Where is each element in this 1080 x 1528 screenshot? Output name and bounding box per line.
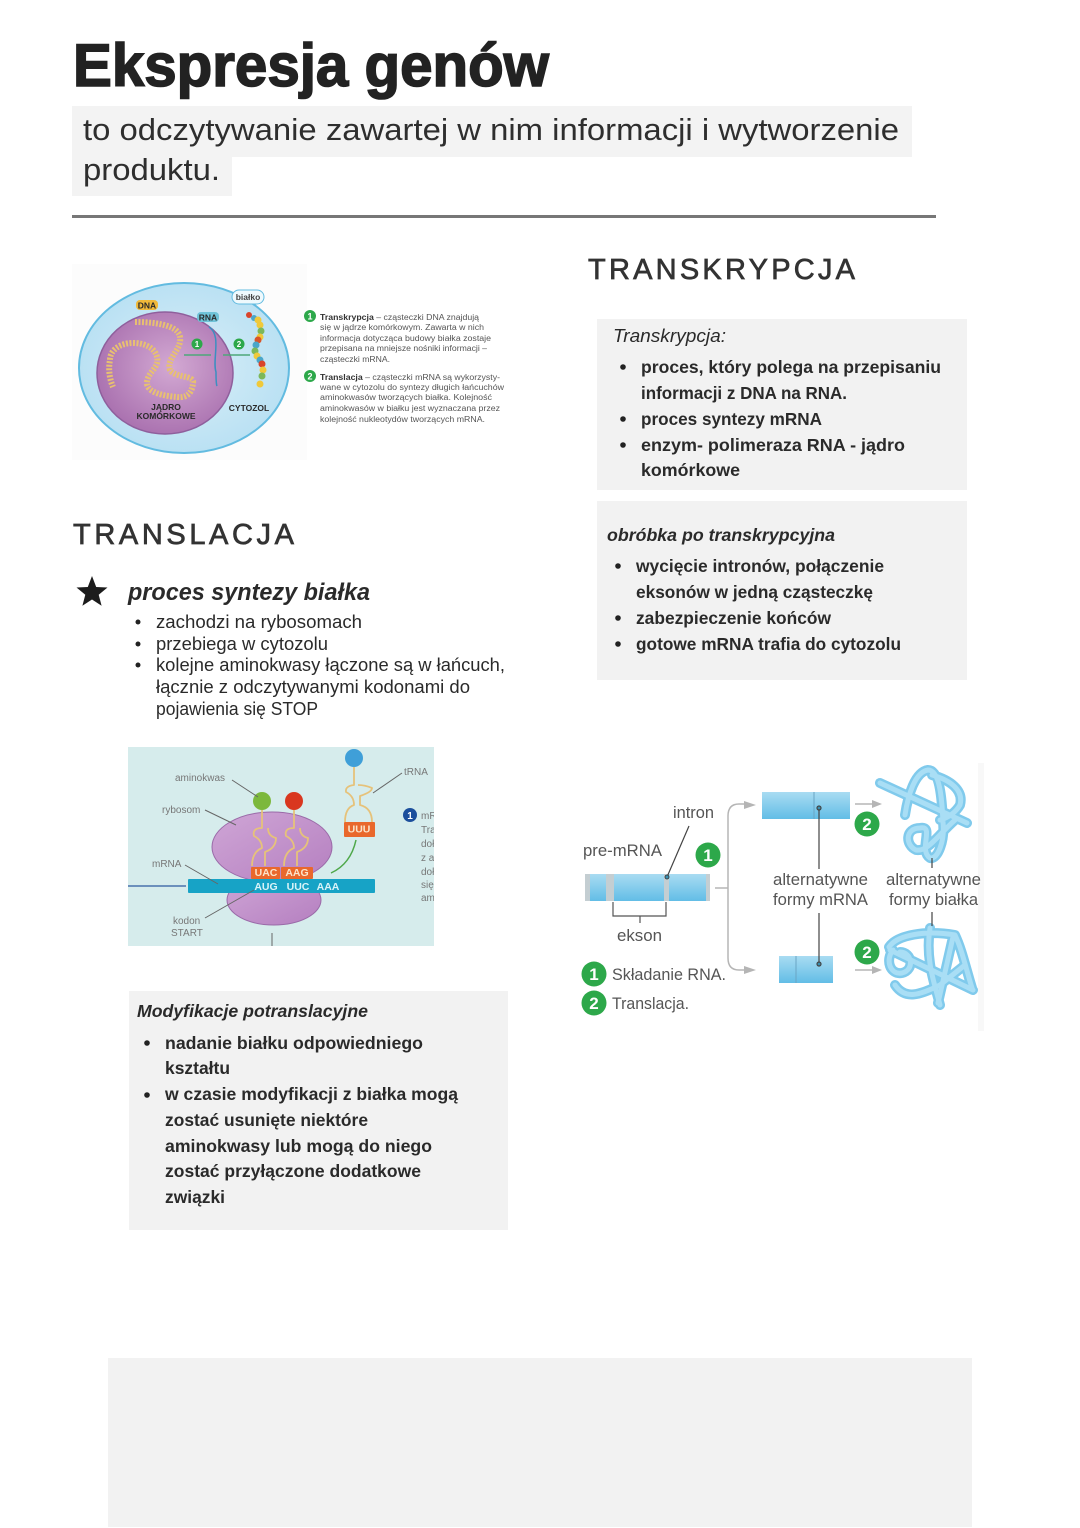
protein label	[886, 870, 981, 909]
figure caption: się w jądrze komórkowym. Zawarta w nich	[320, 323, 484, 332]
panel: transcription: Transkrypcja:	[613, 326, 726, 346]
clipped side note: 1	[407, 811, 413, 822]
step 1 badge	[304, 310, 316, 322]
clipped side note: dołącz	[421, 839, 450, 850]
legend: 1	[589, 965, 599, 984]
legend	[582, 962, 726, 1016]
translation bullet list: przebiega w cytozolu	[156, 633, 328, 654]
anticodons: UUU	[348, 824, 370, 836]
panel: post-translational modifications: aminokwasy lub mogą do niego	[165, 1136, 432, 1156]
mRNA label: formy mRNA	[773, 890, 869, 909]
labels: rybosom	[162, 805, 200, 816]
label lines	[185, 773, 402, 946]
figure caption	[304, 310, 504, 424]
clipped side note: sięga	[421, 880, 445, 891]
panel: post-transcriptional processing: wycięcie intronów, połączenie	[635, 556, 884, 576]
panel: post-transcriptional processing: obróbka po transkrypcyjna	[607, 525, 835, 545]
arrows and step badges: 2	[237, 340, 242, 349]
anticodons	[251, 822, 375, 879]
panel: post-transcriptional processing	[597, 501, 967, 680]
ribosome	[212, 812, 332, 925]
protein label	[232, 290, 264, 304]
translation bullet list: kolejne aminokwasy łączone są w łańcuch,	[156, 654, 505, 675]
panel: transcription: enzym- polimeraza RNA - jądro	[641, 435, 905, 455]
translation bullet list: pojawienia się STOP	[156, 698, 318, 719]
anticodons: AAG	[285, 867, 309, 879]
mRNA form A	[762, 792, 850, 819]
title: Ekspresja genów	[73, 32, 549, 99]
nucleus	[97, 312, 233, 434]
figure caption: informacja dotycząca budowy białka zostaje	[320, 334, 492, 343]
panel: transcription: proces, który polega na przepisaniu	[641, 357, 941, 377]
DNA strand	[109, 322, 193, 397]
heading: Translacja: TRANSLACJA	[73, 519, 295, 551]
panel: post-translational modifications: kształtu	[165, 1058, 230, 1078]
legend: Składanie RNA.	[612, 965, 726, 984]
mRNA strand: AUG	[254, 881, 278, 893]
mRNA label: alternatywne	[773, 870, 868, 889]
pre-mRNA bar	[585, 874, 710, 901]
panel: post-translational modifications	[129, 991, 508, 1230]
panel: post-translational modifications: nadanie białku odpowiedniego	[165, 1033, 423, 1053]
figure: alternative splicing: ekson	[617, 926, 662, 945]
panel: post-translational modifications: Modyfikacje potranslacyjne	[137, 1001, 368, 1021]
intron label: intron	[673, 803, 714, 822]
nucleus label	[136, 402, 196, 421]
nucleus label: JĄDRO	[151, 402, 181, 412]
panel: post-translational modifications: w czasie modyfikacji z białka mogą	[164, 1084, 458, 1104]
RNA label: RNA	[199, 312, 217, 322]
bottom grey panel	[108, 1358, 972, 1527]
arrow: incoming tRNA	[331, 840, 356, 873]
tRNA molecules	[252, 767, 372, 866]
labels	[152, 767, 428, 939]
intron label	[665, 803, 714, 879]
mRNA strand: AAA	[317, 881, 340, 893]
mRNA strand: UUC	[287, 881, 310, 893]
splitting arrows	[715, 800, 882, 974]
translation bullet list: łącznie z odczytywanymi kodonami do	[156, 676, 470, 697]
translation bullet list	[136, 611, 505, 719]
DNA label: DNA	[138, 300, 156, 310]
figure caption: przepisana na mniejsze nośniki informacji –	[320, 344, 488, 353]
amino acid chain	[246, 312, 266, 388]
protein leader lines	[931, 858, 933, 926]
step 2 badges	[854, 812, 880, 964]
figure caption: kolejność nukleotydów tworzących mRNA.	[320, 415, 485, 424]
figure: alternative splicing	[582, 763, 984, 1031]
labels: mRNA	[152, 859, 182, 870]
step 2 badge	[304, 370, 316, 382]
step 1 badge	[696, 842, 720, 868]
clipped side note: z ami	[421, 853, 445, 864]
figure caption: aminokwasów w białku jest wyznaczana przez	[320, 404, 500, 413]
translation key statement: proces syntezy białka	[127, 579, 370, 606]
panel: post-translational modifications: związki	[165, 1187, 225, 1207]
cell body	[79, 283, 289, 453]
legend: Translacja.	[612, 994, 689, 1013]
step 1 badge: 1	[307, 312, 313, 322]
subtitle highlighted definition	[72, 106, 912, 196]
protein form B	[889, 928, 973, 1005]
figure caption: Transkrypcja – cząsteczki DNA znajdują	[320, 313, 480, 322]
panel: post-transcriptional processing: zabezpieczenie końców	[636, 608, 831, 628]
arrows and step badges: 1	[195, 340, 200, 349]
panel: transcription: informacji z DNA na RNA.	[641, 383, 847, 403]
nucleus label: KOMÓRKOWE	[136, 410, 196, 421]
legend: 2	[589, 994, 599, 1013]
panel: post-translational modifications: zostać usunięte niektóre	[165, 1110, 368, 1130]
protein label: białko	[236, 292, 260, 302]
panel: transcription	[597, 319, 967, 490]
panel: post-translational modifications: zostać przyłączone dodatkowe	[165, 1161, 421, 1181]
pre-mRNA label: pre-mRNA	[583, 841, 663, 860]
protein label: formy białka	[889, 890, 979, 909]
mRNA strand	[209, 327, 217, 386]
figure caption: wane w cytozolu do syntezy długich łańcuchów	[319, 383, 504, 392]
labels: kodon	[173, 916, 200, 927]
translation bullet list: zachodzi na rybosomach	[156, 611, 362, 632]
mRNA strand	[128, 879, 375, 893]
subtitle highlighted definition: to odczytywanie zawartej w nim informacji i wytworzenie	[83, 112, 899, 147]
step 1 badge: 1	[703, 846, 713, 865]
labels: tRNA	[404, 767, 428, 778]
icon: star	[76, 576, 108, 606]
clipped side note	[403, 808, 434, 901]
mRNA leader lines	[817, 806, 821, 966]
figure: gene expression in the cell	[72, 264, 307, 460]
protein label: alternatywne	[886, 870, 981, 889]
panel: transcription: komórkowe	[641, 460, 740, 480]
figure: ribosome translation	[128, 747, 451, 946]
clipped side note: dołącz	[421, 867, 450, 878]
panel: post-transcriptional processing: gotowe mRNA trafia do cytozolu	[636, 634, 901, 654]
cytosol label: CYTOZOL	[229, 403, 269, 413]
clipped side note: mRNA	[421, 811, 451, 822]
amino acids	[253, 749, 363, 810]
exon bracket	[613, 902, 666, 923]
mRNA form B	[779, 956, 833, 983]
labels: START	[171, 928, 203, 939]
figure caption: aminokwasów tworzących białka. Kolejność	[320, 393, 492, 402]
clipped side note: Transl	[421, 825, 448, 836]
arrows and step badges	[184, 338, 250, 355]
panel: post-transcriptional processing: eksonów w jedną cząsteczkę	[636, 582, 873, 602]
subtitle highlighted definition: produktu.	[83, 152, 220, 187]
heading: Transkrypcja: TRANSKRYPCJA	[588, 254, 856, 286]
step 2 badges: 2	[862, 943, 872, 962]
figure caption: Translacja – cząsteczki mRNA są wykorzysty-	[320, 373, 500, 382]
figure caption: cząsteczki mRNA.	[320, 355, 390, 364]
anticodons: UAC	[255, 867, 278, 879]
mRNA label	[773, 870, 869, 909]
protein form A	[880, 770, 967, 858]
panel: transcription: proces syntezy mRNA	[641, 409, 822, 429]
clipped side note: amino	[421, 893, 449, 904]
labels: aminokwas	[175, 773, 225, 784]
step 2 badge: 2	[307, 372, 313, 382]
step 2 badges: 2	[862, 815, 872, 834]
